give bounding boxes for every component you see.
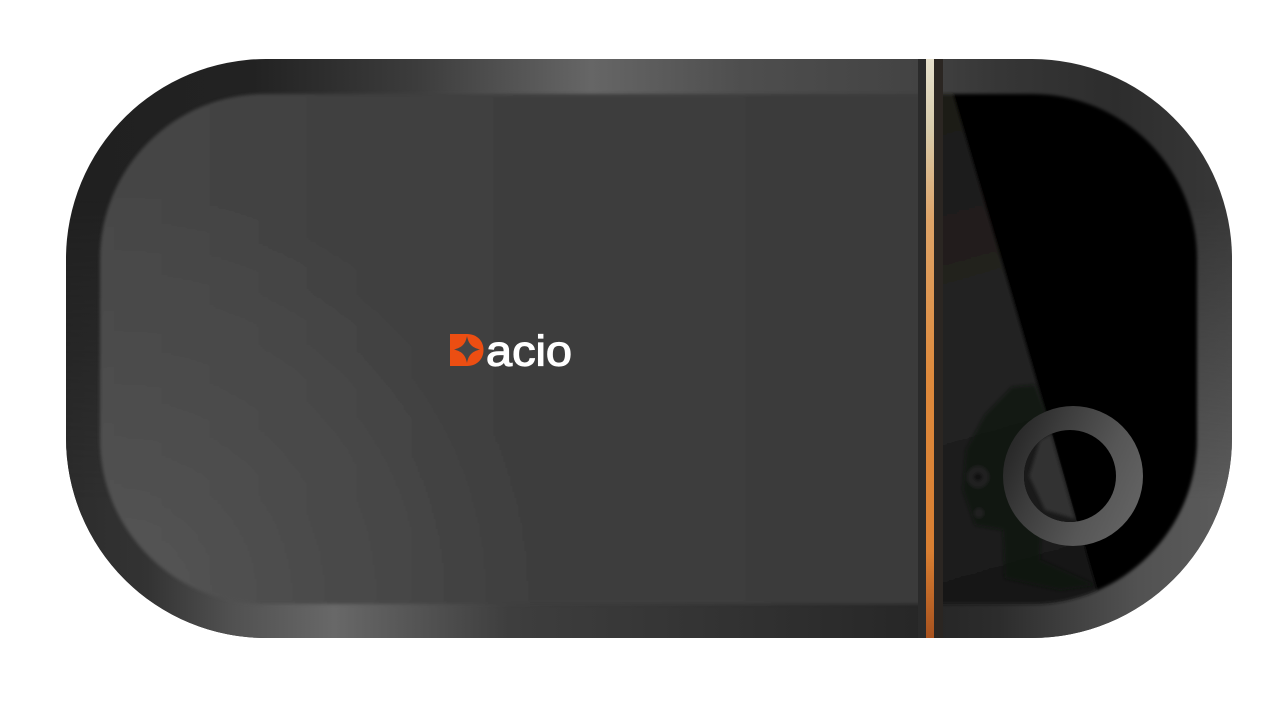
black glass panel — [930, 94, 1200, 604]
outer frame — [66, 59, 1232, 638]
device illustration — [66, 59, 1232, 638]
camera mechanism shadow — [963, 385, 1095, 590]
divider strip — [918, 59, 943, 638]
screen panel — [100, 94, 1200, 604]
camera ring — [1003, 406, 1143, 546]
wordmark: acio — [486, 328, 572, 376]
icon: D mark with star — [450, 334, 484, 366]
logo: Dacio — [450, 328, 572, 376]
